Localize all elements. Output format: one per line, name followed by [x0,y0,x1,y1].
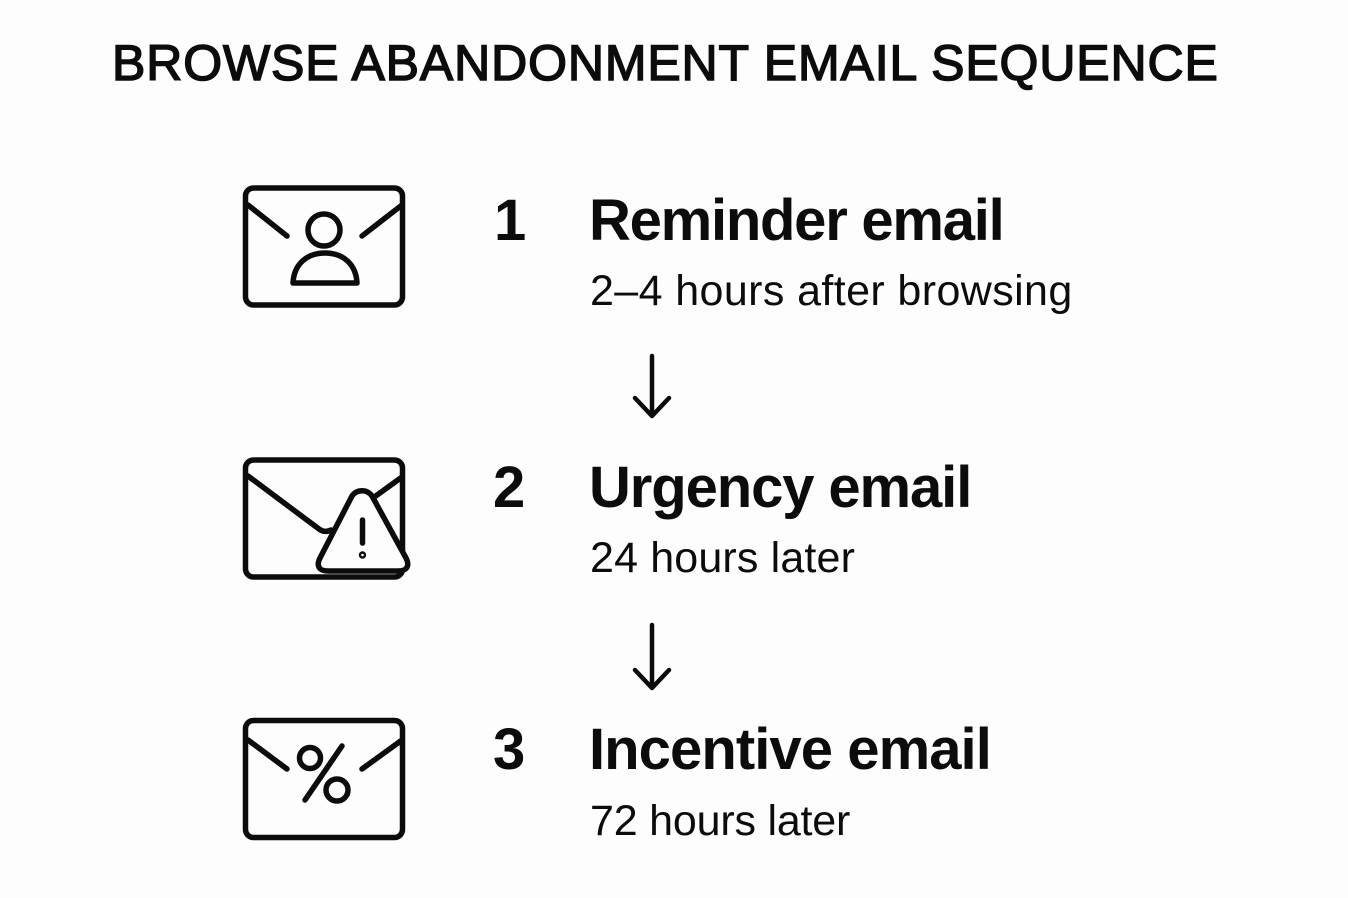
step 3 heading: Incentive email [589,717,991,782]
arrow: step 1 to step 2 [635,356,669,416]
step 2 timing: 24 hours later [590,534,855,582]
icon: envelope with percent sign [246,720,402,838]
step 2 heading: Urgency email [589,455,971,520]
step 3 number: 3 [493,717,525,782]
arrow: step 2 to step 3 [635,625,669,688]
title: BROWSE ABANDONMENT EMAIL SEQUENCE [112,35,1219,91]
step 1 timing: 2–4 hours after browsing [590,267,1073,315]
icon: envelope with person [246,188,402,305]
icon: envelope with warning triangle [246,460,408,577]
step 2 number: 2 [493,455,525,520]
step 1 heading: Reminder email [589,188,1003,253]
step 3 timing: 72 hours later [590,797,850,845]
step 1 number: 1 [494,188,526,253]
